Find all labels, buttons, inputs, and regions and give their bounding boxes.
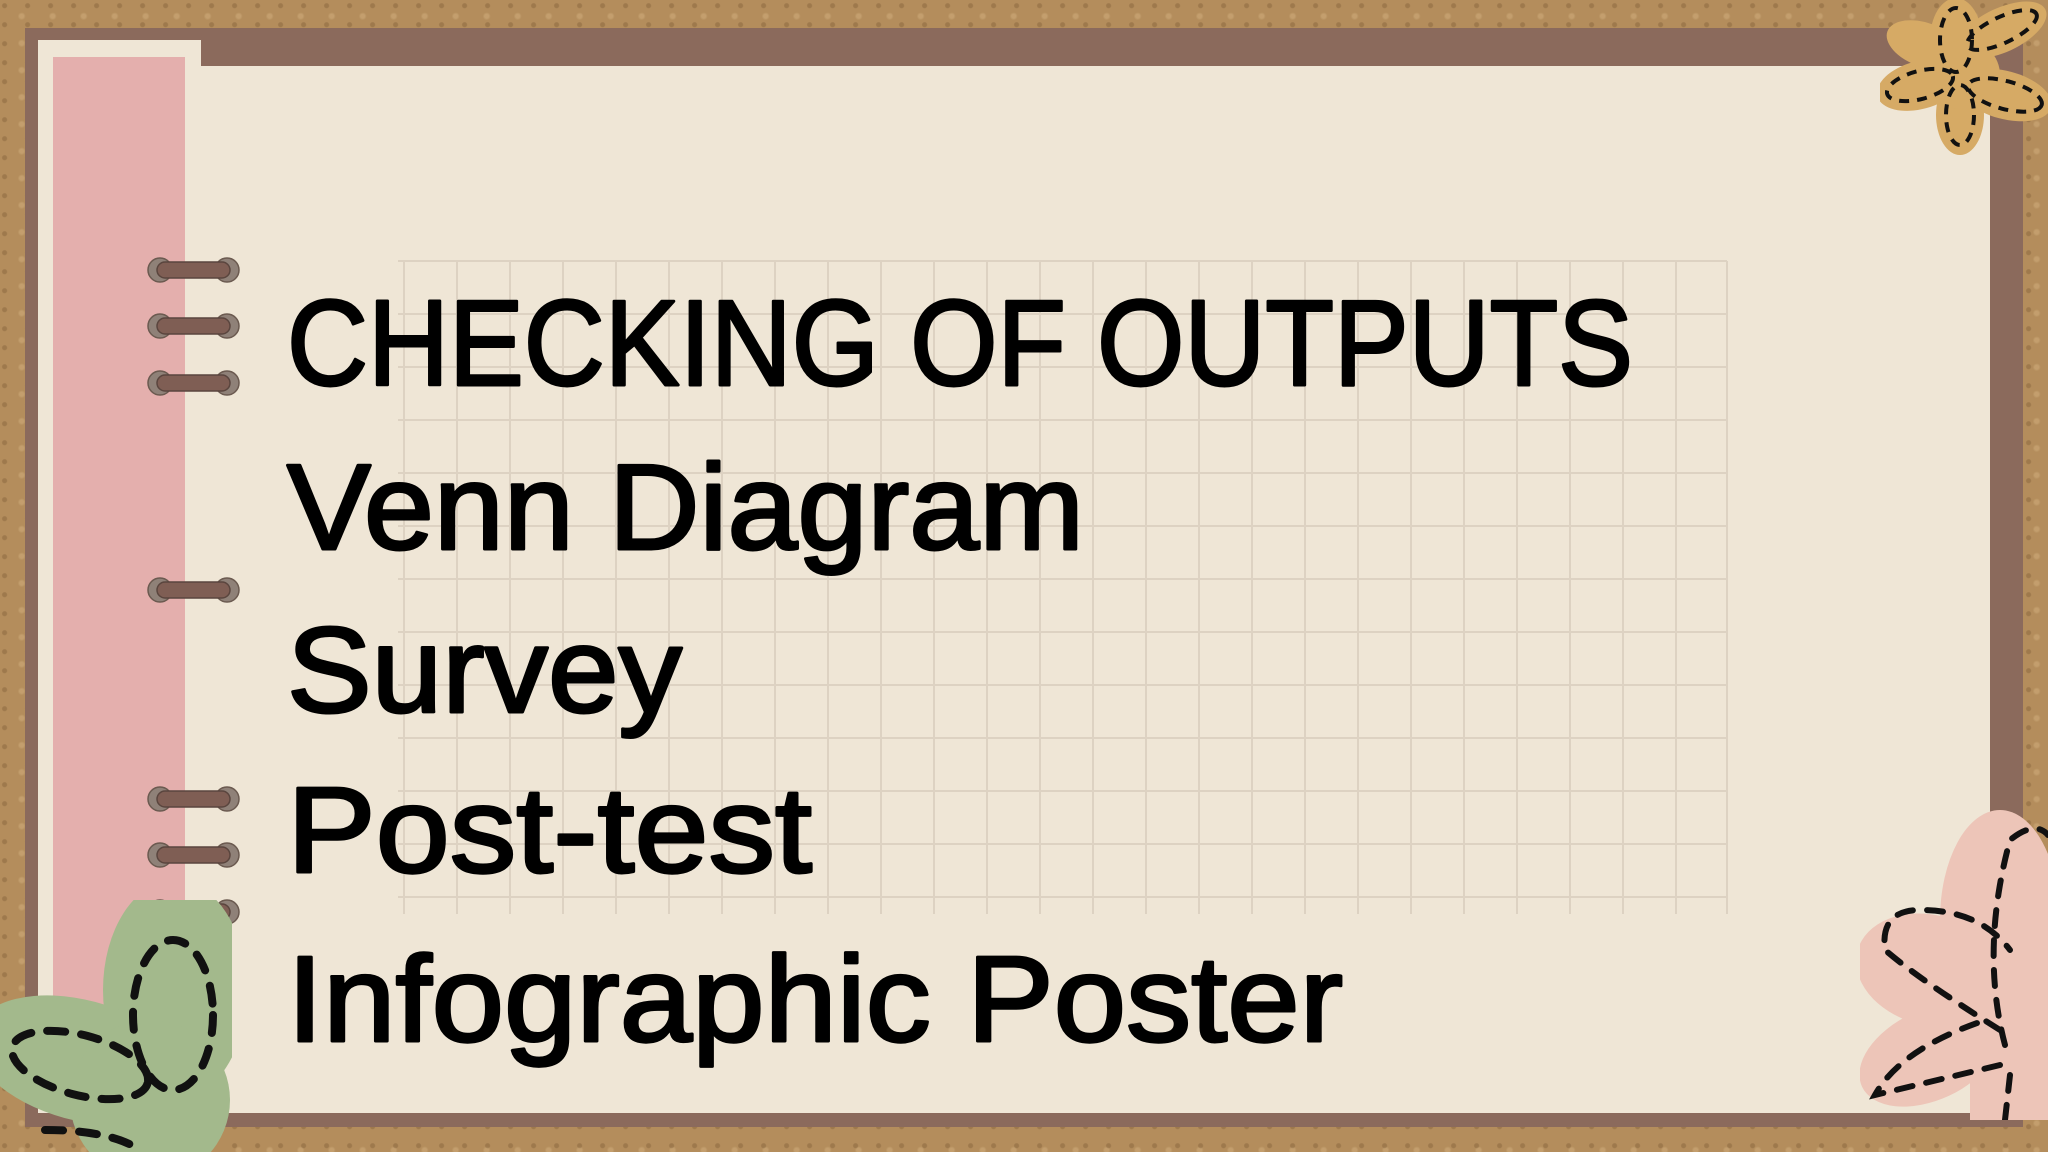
heading: CHECKING OF OUTPUTS: CHECKING OF OUTPUTS [287,275,1633,411]
icon: pink flower bottom right [1860,810,2048,1120]
item: Infographic Poster: Infographic Poster [287,931,1343,1067]
cream page [201,66,1990,1113]
icon: gold flower top right [1880,0,2048,155]
icon: green flower bottom left [0,900,232,1152]
left cream cover [38,40,201,1113]
item: Survey: Survey [287,602,682,738]
item: Venn Diagram: Venn Diagram [287,439,1084,575]
pink strip [53,57,185,1113]
item: Post-test: Post-test [287,762,812,898]
